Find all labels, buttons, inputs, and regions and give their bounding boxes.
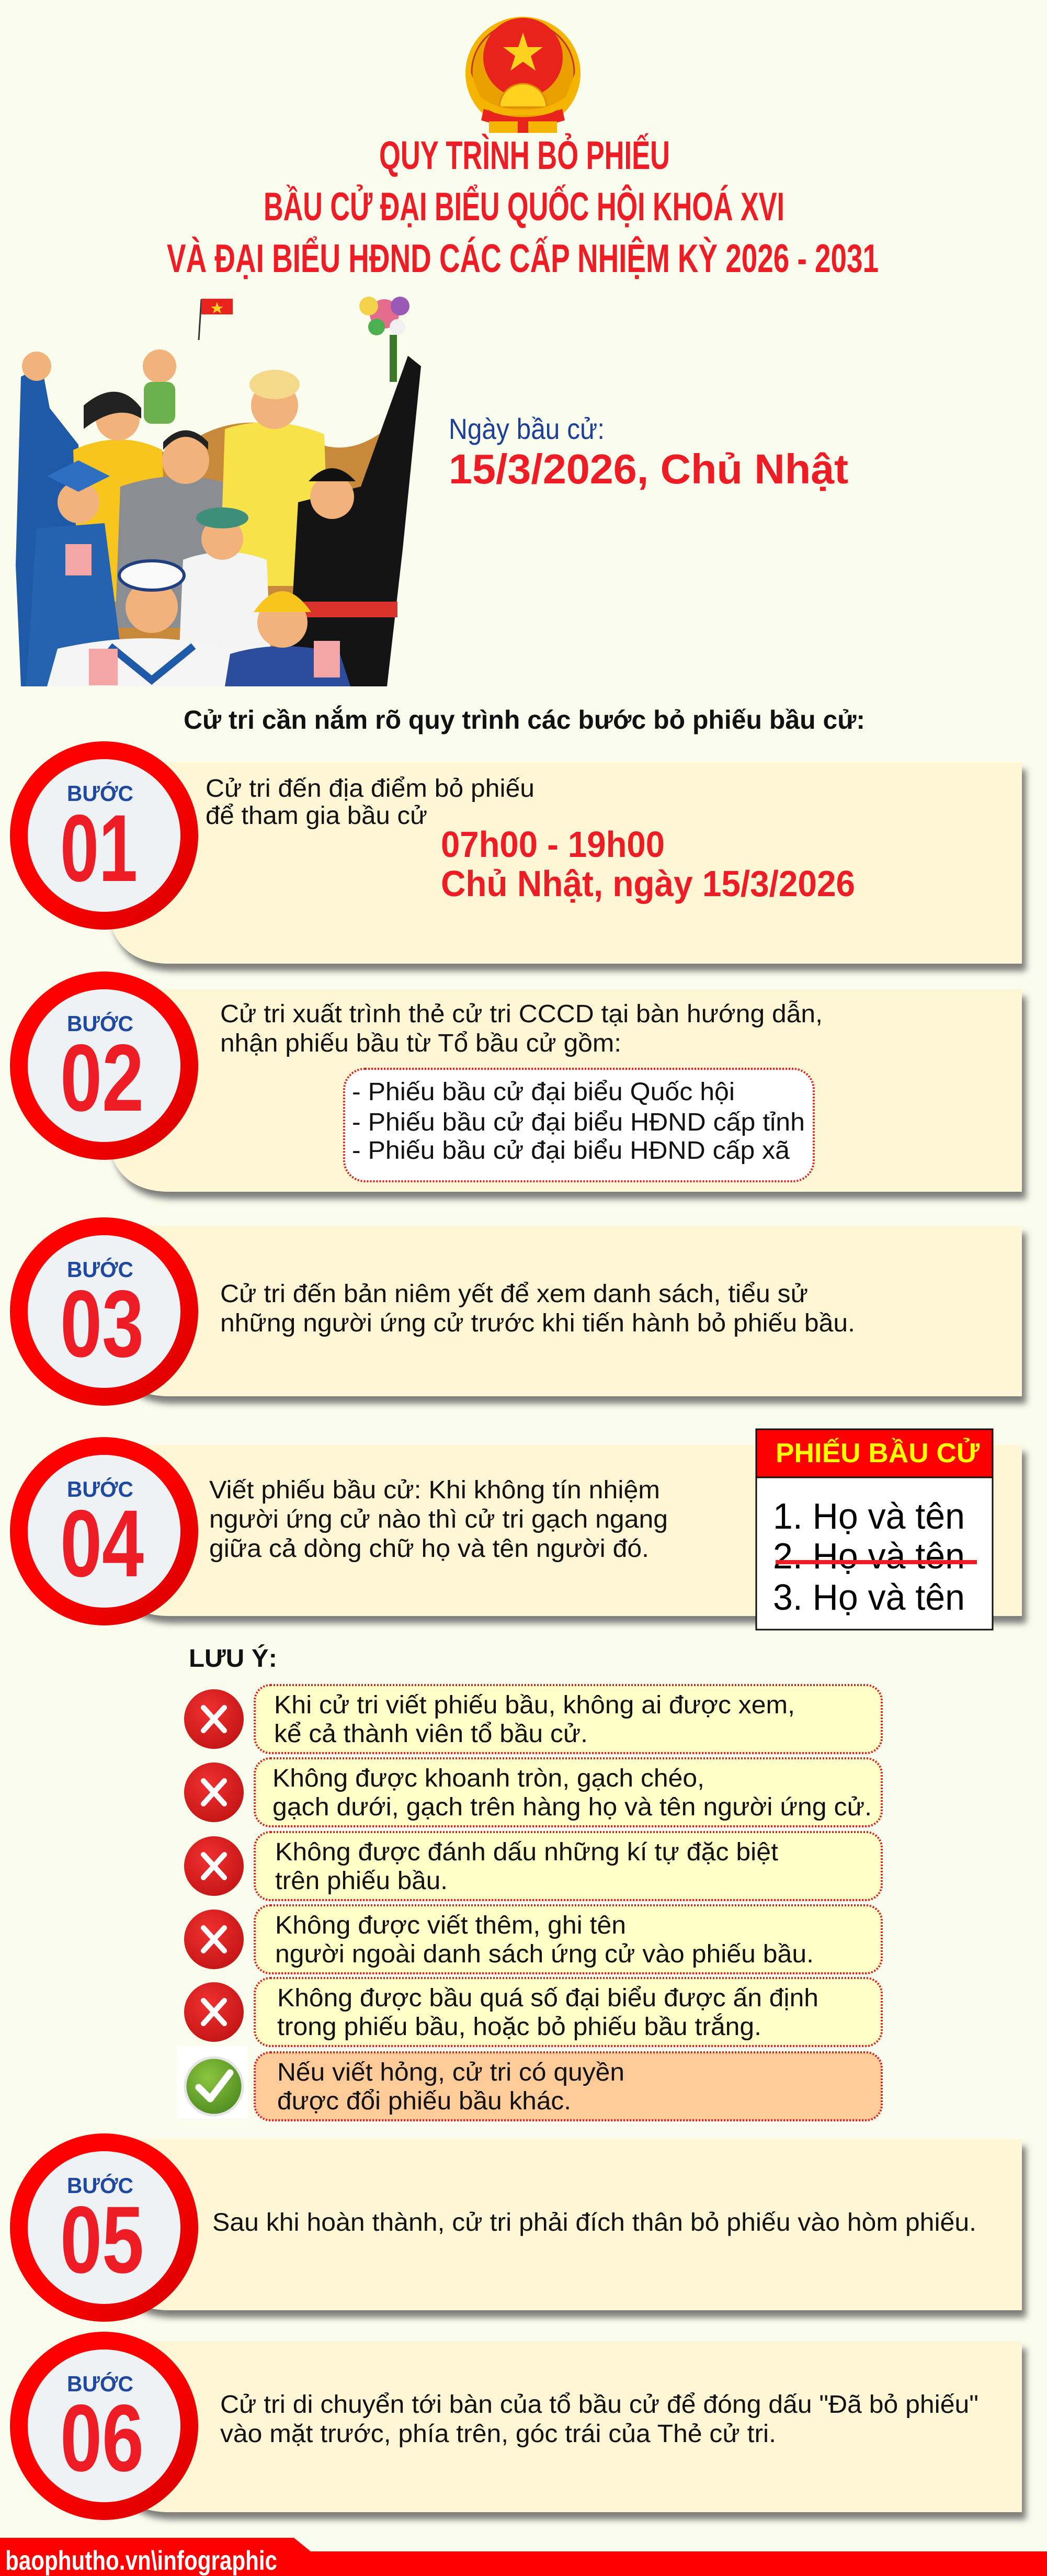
student blue hat [26, 523, 126, 686]
note 5: trong phiếu bầu, hoặc bỏ phiếu bầu trắng. [277, 2013, 761, 2041]
badge 06: 06 [60, 2385, 144, 2491]
note 6 [177, 2046, 882, 2120]
badge 01 [10, 741, 198, 930]
title [167, 133, 879, 281]
badge 01: BƯỚC [67, 781, 133, 806]
illustration: voters group [16, 297, 421, 686]
note 5: Không được bầu quá số đại biểu được ấn định [277, 1984, 818, 2012]
text: Cử tri xuất trình thẻ cử tri CCCD tại bàn hướng dẫn, [220, 1000, 823, 1028]
flowers [359, 297, 409, 382]
flag [199, 299, 233, 340]
note 1: kể cả thành viên tổ bầu cử. [274, 1720, 588, 1748]
ballot sample: PHIẾU BẦU CỬ [776, 1438, 980, 1468]
note 5 [184, 1978, 882, 2046]
text: Viết phiếu bầu cử: Khi không tín nhiệm [209, 1476, 660, 1504]
badge 04: 04 [60, 1490, 144, 1597]
text: vào mặt trước, phía trên, góc trái của Thẻ cử tri. [220, 2420, 776, 2448]
background mass [21, 419, 397, 686]
text: giữa cả dòng chữ họ và tên người đó. [209, 1535, 649, 1563]
badge 06: BƯỚC [67, 2371, 133, 2396]
intro heading: Cử tri cần nắm rõ quy trình các bước bỏ phiếu bầu cử: [184, 705, 865, 735]
ballot list box: - Phiếu bầu cử đại biểu HĐND cấp xã [352, 1137, 790, 1165]
panel: step 01 [10, 741, 1022, 964]
text: Cử tri đến địa điểm bỏ phiếu [206, 775, 534, 803]
panel: step 06 [10, 2332, 1022, 2520]
text: Sau khi hoàn thành, cử tri phải đích thân bỏ phiếu vào hòm phiếu. [212, 2209, 976, 2236]
panel: step 02 [10, 971, 1022, 1192]
note 1: Khi cử tri viết phiếu bầu, không ai được xem, [274, 1691, 795, 1719]
badge 03: BƯỚC [67, 1257, 133, 1282]
yellow woman [73, 439, 167, 602]
election date [449, 412, 848, 492]
footer: baophutho.vn\infographic [5, 2546, 277, 2576]
note 3: trên phiếu bầu. [275, 1867, 448, 1895]
badge 01: 01 [60, 795, 138, 901]
title: QUY TRÌNH BỎ PHIẾU [379, 133, 670, 178]
ballot sample [756, 1429, 993, 1630]
text: Cử tri đến bản niêm yết để xem danh sách, tiểu sử [220, 1280, 808, 1308]
text [220, 2391, 978, 2448]
panel: step 03 [10, 1217, 1022, 1406]
panel: step 05 [10, 2133, 1022, 2322]
note 2: Không được khoanh tròn, gạch chéo, [272, 1765, 704, 1792]
badge 06 [10, 2332, 198, 2520]
teal hat woman [178, 552, 272, 686]
note 4: người ngoài danh sách ứng cử vào phiếu bầu. [275, 1940, 814, 1968]
note 3 [184, 1832, 882, 1900]
worker [225, 646, 350, 686]
note 6: Nếu viết hỏng, cử tri có quyền [277, 2059, 624, 2086]
ballot sample: 1. Họ và tên [773, 1496, 965, 1536]
text: người ứng cử nào thì cử tri gạch ngang [209, 1506, 668, 1533]
old man yellow [220, 422, 329, 586]
text: để tham gia bầu cử [206, 802, 427, 830]
text [206, 775, 534, 830]
grey suit man [115, 476, 241, 628]
notes list [177, 1685, 882, 2120]
time: 07h00 - 19h00 [441, 824, 665, 865]
badge 05: BƯỚC [67, 2173, 133, 2198]
time: Chủ Nhật, ngày 15/3/2026 [441, 863, 855, 904]
ballot sample: 2. Họ và tên [773, 1535, 965, 1576]
ballot list box: - Phiếu bầu cử đại biểu Quốc hội [352, 1078, 735, 1106]
left figure blue [16, 366, 89, 686]
icon: national emblem [465, 17, 581, 133]
note 2: gạch dưới, gạch trên hàng họ và tên người ứng cử. [272, 1793, 872, 1821]
text: những người ứng cử trước khi tiến hành bỏ phiếu bầu. [220, 1309, 855, 1337]
text [220, 1000, 823, 1057]
right woman black [288, 356, 421, 686]
note 1 [184, 1685, 882, 1753]
badge 05 [10, 2133, 198, 2322]
badge 03: 03 [60, 1270, 144, 1377]
sailor [47, 638, 235, 686]
heading: notes: LƯU Ý: [189, 1644, 277, 1673]
election date: Ngày bầu cử: [449, 412, 605, 445]
badge 04 [10, 1437, 198, 1625]
badge 05: 05 [60, 2186, 144, 2293]
note 4 [184, 1905, 882, 1973]
note 4: Không được viết thêm, ghi tên [275, 1912, 626, 1939]
title: BẦU CỬ ĐẠI BIỂU QUỐC HỘI KHOÁ XVI [264, 184, 784, 229]
text [209, 1476, 668, 1563]
footer [0, 2538, 1047, 2576]
time [441, 824, 855, 904]
badge 04: BƯỚC [67, 1476, 133, 1501]
election date: 15/3/2026, Chủ Nhật [449, 446, 848, 492]
ballot list box: - Phiếu bầu cử đại biểu HĐND cấp tỉnh [352, 1109, 805, 1136]
badge 02 [10, 971, 198, 1160]
ballot list box [344, 1069, 814, 1181]
note 2 [184, 1758, 882, 1826]
text: nhận phiếu bầu từ Tổ bầu cử gồm: [220, 1030, 621, 1057]
note 6: được đổi phiếu bầu khác. [277, 2087, 571, 2115]
text [220, 1280, 855, 1337]
note 3: Không được đánh dấu những kí tự đặc biệt [275, 1838, 778, 1866]
badge 03 [10, 1217, 198, 1406]
ballot sample: 3. Họ và tên [773, 1577, 965, 1618]
panel: step 04 [10, 1429, 1022, 1630]
badge 02: BƯỚC [67, 1011, 133, 1036]
baby [143, 349, 176, 383]
text: Cử tri di chuyển tới bàn của tổ bầu cử để đóng dấu "Đã bỏ phiếu" [220, 2391, 978, 2419]
badge 02: 02 [60, 1024, 144, 1131]
